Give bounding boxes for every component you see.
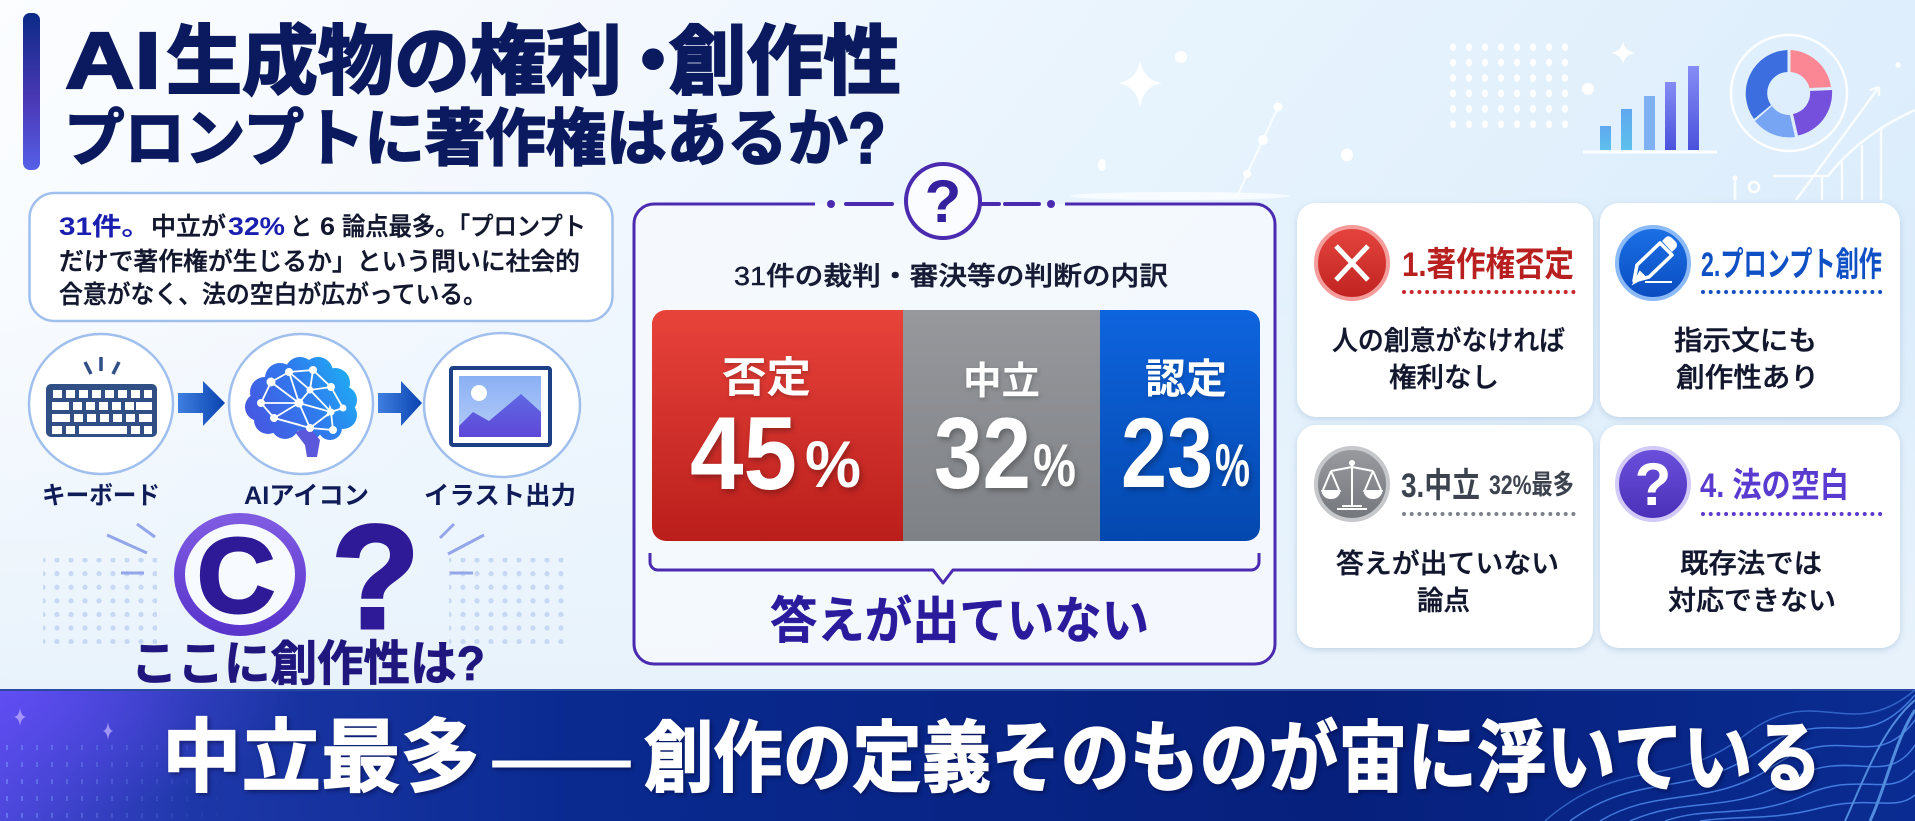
card 4 heading: 4. 法の空白 (1700, 467, 1849, 505)
chart heading: 31件の裁判・審決等の判断の内訳 (734, 261, 1168, 291)
title line 1 (65, 16, 901, 105)
panel: summary callout (30, 193, 612, 321)
title line 1: 創作性 (669, 20, 901, 105)
card 2 dotted rule (1703, 290, 1881, 294)
summary text line 1 (59, 213, 586, 241)
title line 1: 生成物の権利 (166, 20, 622, 105)
card 4 body: 対応できない (1668, 586, 1836, 616)
panel frame (634, 204, 1275, 664)
caption: ここに創作性は? (131, 638, 485, 691)
banner headline: —— (488, 700, 635, 807)
arrow 2 (378, 381, 422, 426)
card 4 body (1668, 549, 1836, 616)
summary text line 1: 6 (320, 213, 335, 241)
card 3 heading (1401, 467, 1574, 505)
arrow 1 (178, 381, 225, 426)
summary text line 1: 中立が (151, 213, 226, 241)
card 4 dotted rule (1703, 512, 1881, 516)
bottom banner (0, 689, 1915, 821)
icon: copyright mark: C (197, 517, 275, 635)
icon: cross (1316, 227, 1388, 299)
donut chart icon (1731, 35, 1847, 151)
segment: denied 45% (652, 310, 903, 541)
illustration output step (424, 333, 580, 510)
icon: bar and donut chart (1583, 35, 1847, 154)
card 1 dotted rule (1404, 290, 1574, 294)
card 1 body: 人の創意がなければ (1332, 326, 1565, 356)
panel: breakdown chart (634, 164, 1275, 664)
title line 2: ? (848, 99, 886, 179)
label: keyboard: キーボード (42, 482, 160, 510)
card 1 body: 権利なし (1389, 363, 1499, 393)
title accent bar (23, 13, 40, 170)
panel: card 3 (1297, 425, 1593, 648)
copyright question visual (43, 495, 571, 691)
keyboard step (29, 334, 173, 510)
summary text line 3: 合意がなく、法の空白が広がっている。 (59, 281, 487, 309)
card 2 body (1674, 326, 1819, 393)
segment: neutral 32%: % (1033, 432, 1076, 499)
background decoration (1070, 40, 1915, 200)
panel: card 4 (1600, 425, 1900, 648)
conclusion text: 答えが出ていない (770, 593, 1149, 649)
card 1 body (1332, 326, 1565, 393)
segment: recognized 23%: 23 (1121, 397, 1213, 508)
title line 1: ・ (615, 20, 691, 105)
AI brain step (229, 334, 373, 510)
panel: card 1 (1297, 203, 1593, 417)
summary text line 1: と (290, 213, 312, 241)
card 3 dotted rule (1404, 512, 1574, 516)
icon: question: ? (1635, 451, 1671, 518)
card 3 body (1336, 549, 1559, 616)
segment: denied 45%: 否定 (722, 354, 811, 401)
accent rays (107, 524, 484, 573)
card 4 body: 既存法では (1680, 549, 1822, 579)
icon: question (1617, 448, 1689, 520)
card 3 body: 答えが出ていない (1336, 549, 1559, 579)
dot texture right (449, 558, 571, 644)
bar chart icon (1583, 66, 1717, 154)
card 2 body: 創作性あり (1676, 363, 1819, 393)
card 3 body: 論点 (1417, 586, 1470, 616)
icon: scales (1316, 448, 1388, 520)
card 3 heading: 32%最多 (1489, 470, 1574, 500)
title (23, 13, 901, 179)
icon: question mark: ? (331, 495, 420, 660)
banner headline: 中立最多 (162, 693, 480, 809)
stacked bar chart (652, 310, 1260, 541)
icon: copyright mark (180, 517, 300, 635)
segment: denied 45%: % (805, 427, 861, 501)
dot texture left (43, 558, 157, 644)
segment: neutral 32%: 32 (934, 398, 1031, 510)
label: illustration output: イラスト出力 (424, 482, 576, 510)
segment: neutral 32%: 中立 (963, 361, 1040, 403)
top ornament (827, 164, 1055, 238)
summary text line 1: 論点最多。「プロンプト (342, 213, 586, 241)
card 1 heading: 1.著作権否定 (1402, 246, 1574, 284)
title line 1: AI (65, 16, 161, 105)
segment: recognized 23%: 認定 (1145, 356, 1227, 402)
card 3 heading: 3.中立 (1401, 467, 1480, 505)
icon: question circle: ? (925, 168, 961, 235)
label: AI icon: AIアイコン (244, 482, 369, 510)
segment: recognized 23%: % (1215, 432, 1250, 499)
icon: question circle (906, 164, 980, 238)
bracket (650, 553, 1259, 583)
summary text line 1: 31件。 (59, 213, 151, 241)
summary text line 1: 32% (228, 213, 285, 241)
segment: neutral 32% (903, 310, 1100, 541)
icon: pen (1617, 227, 1689, 299)
card 2 body: 指示文にも (1674, 326, 1817, 356)
segment: denied 45%: 45 (690, 396, 797, 512)
segment: recognized 23% (1100, 310, 1260, 541)
panel: card 2 (1600, 203, 1900, 417)
title line 2: プロンプトに著作権はあるか (64, 105, 848, 174)
process flow (29, 333, 580, 510)
summary text line 2: だけで著作権が生じるか」という問いに社会的 (59, 248, 580, 276)
banner headline (162, 693, 1822, 809)
